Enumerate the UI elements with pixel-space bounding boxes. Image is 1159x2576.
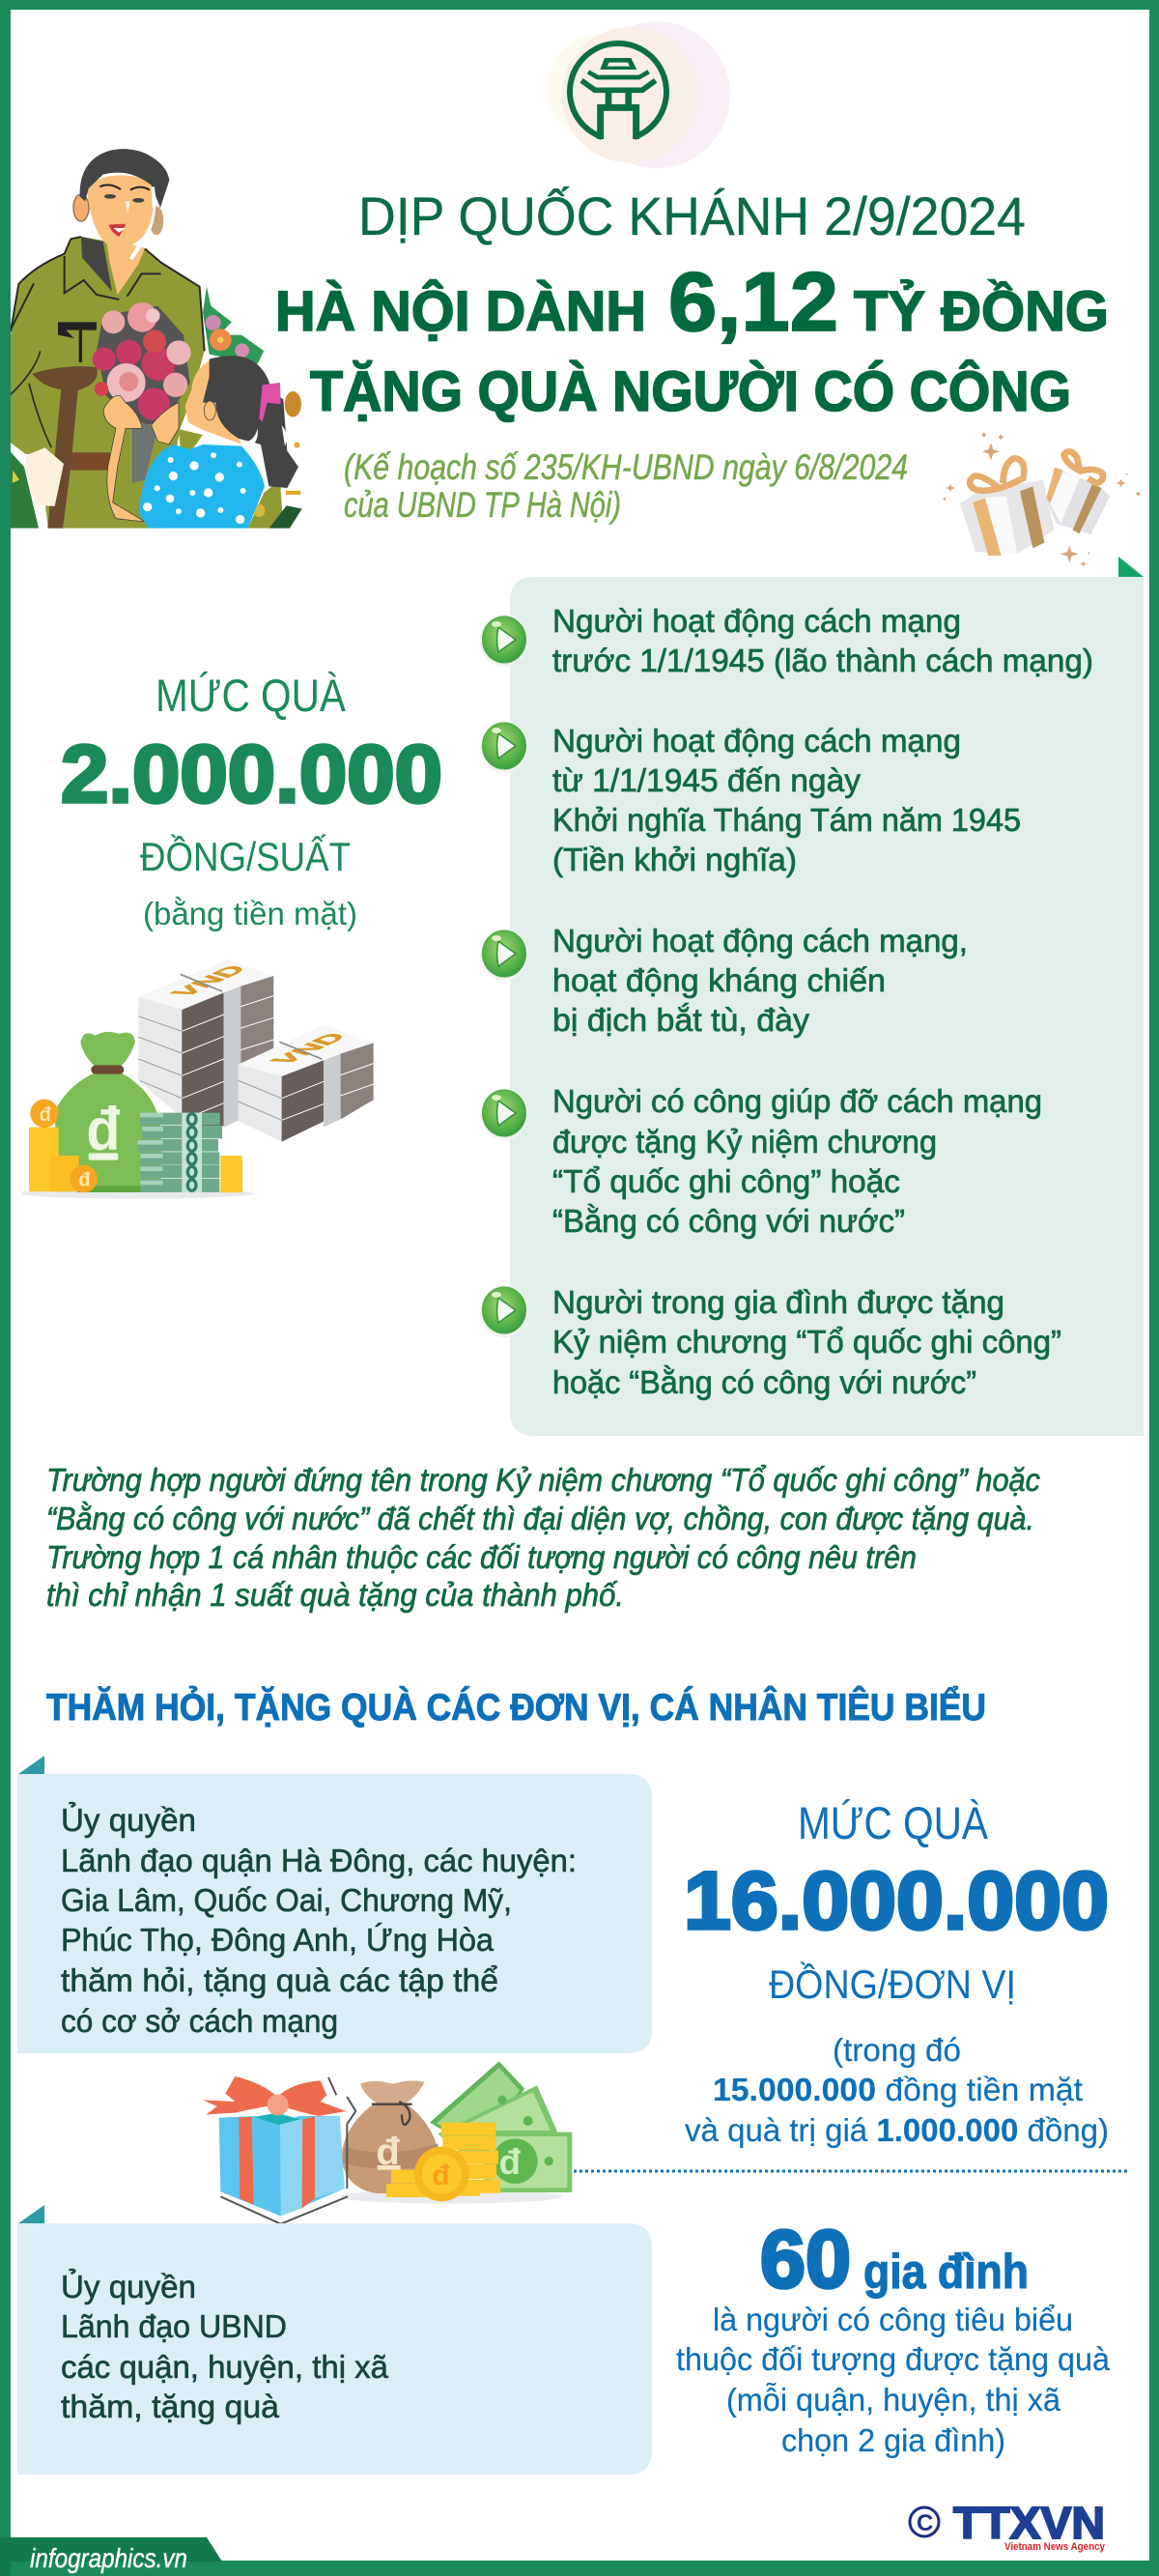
gift amount: 2.000.000: ĐỒNG/SUẤT — [140, 833, 351, 879]
item 3: bị địch bắt tù, đày — [552, 1002, 810, 1038]
section heading: THĂM HỎI, TẶNG QUÀ CÁC ĐƠN VỊ, CÁ NHÂN TIÊU BIỂU — [46, 1685, 986, 1729]
stat: 60 families: 60 — [760, 2214, 851, 2304]
gift amount: 16.000.000: 16.000.000 — [684, 1855, 1109, 1946]
illustration: gift, bag, coins, banknotes: đ — [499, 2142, 522, 2182]
title line 2: TẶNG QUÀ NGƯỜI CÓ CÔNG — [310, 360, 1071, 423]
item 4: “Tổ quốc ghi công” hoặc — [552, 1163, 900, 1199]
panel: collectives: Phúc Thọ, Đông Anh, Ứng Hòa — [61, 1922, 495, 1958]
illustration: gift, bag, coins, banknotes: đ — [376, 2131, 400, 2173]
item 2: (Tiền khởi nghĩa) — [552, 842, 797, 877]
panel: collectives: Gia Lâm, Quốc Oai, Chương Mỹ, — [61, 1882, 512, 1918]
illustration: money stacks and bag: VND — [166, 963, 253, 999]
item 1: Người hoạt động cách mạng — [552, 603, 961, 639]
item 4: được tặng Kỷ niệm chương — [552, 1124, 937, 1159]
illustration: money stacks and bag: đ — [40, 1104, 52, 1126]
gift amount: 16.000.000: 15.000.000 đồng tiền mặt — [713, 2072, 1083, 2107]
gift amount: 16.000.000 — [684, 1797, 1109, 2148]
stat: 60 families: gia đình — [863, 2245, 1029, 2299]
title line 1: HÀ NỘI DÀNH — [275, 280, 646, 343]
subtitle: plan reference: (Kế hoạch số 235/KH-UBND ngày 6/8/2024 — [344, 447, 908, 487]
item 5: hoặc “Bằng có công với nước” — [552, 1364, 976, 1400]
illustration: gift, bag, coins, banknotes: đ — [432, 2160, 450, 2191]
stat: 60 families: thuộc đối tượng được tặng quà — [676, 2341, 1111, 2377]
gift amount: 2.000.000: MỨC QUÀ — [155, 670, 347, 721]
item 2: từ 1/1/1945 đến ngày — [552, 762, 862, 798]
item 5: Người trong gia đình được tặng — [552, 1284, 1004, 1320]
corner tab — [1118, 557, 1144, 577]
panel: families: Lãnh đạo UBND — [61, 2308, 287, 2344]
panel background — [510, 577, 1144, 1436]
illustration: money stacks and bag: đ — [86, 1096, 121, 1163]
gift amount: 2.000.000 — [61, 670, 442, 931]
item 3: Người hoạt động cách mạng, — [552, 923, 968, 959]
title line 1 — [275, 256, 1109, 349]
note text: Trường hợp 1 cá nhân thuộc các đối tượng người có công nêu trên — [46, 1539, 917, 1575]
heading: occasion: DỊP QUỐC KHÁNH 2/9/2024 — [358, 186, 1026, 246]
note text: Trường hợp người đứng tên trong Kỷ niệm chương “Tổ quốc ghi công” hoặc — [46, 1462, 1040, 1498]
illustration: veteran and girl with flowers — [10, 149, 302, 529]
stat: 60 families: là người có công tiêu biểu — [713, 2302, 1073, 2337]
panel: families: thăm, tặng quà — [61, 2389, 280, 2424]
item 3 — [480, 923, 968, 1038]
stat: 60 families — [676, 2214, 1111, 2458]
stat: 60 families: chọn 2 gia đình) — [781, 2422, 1005, 2458]
item 1 — [480, 603, 1093, 678]
panel: families — [17, 2205, 652, 2475]
panel: families: Ủy quyền — [61, 2269, 196, 2304]
note text: “Bằng có công với nước” đã chết thì đại diện vợ, chồng, con được tặng quà. — [46, 1501, 1034, 1536]
title line 1: TỶ ĐỒNG — [854, 280, 1109, 343]
item 2: Người hoạt động cách mạng — [552, 723, 961, 758]
item 4 — [480, 1083, 1042, 1239]
title line 1: 6,12 — [668, 256, 838, 349]
panel: collectives — [17, 1756, 652, 2053]
subtitle: plan reference: của UBND TP Hà Nội) — [344, 485, 621, 525]
gift amount: 16.000.000: (trong đó — [833, 2032, 961, 2068]
logo: TTXVN — [910, 2498, 1106, 2553]
panel: recipients — [480, 557, 1144, 1436]
gift amount: 16.000.000: ĐỒNG/ĐƠN VỊ — [769, 1961, 1016, 2007]
illustration: money stacks and bag — [20, 959, 374, 1199]
icon: white gift boxes — [944, 432, 1141, 567]
icon: Hanoi emblem — [548, 21, 730, 168]
item 2 — [480, 721, 1021, 877]
panel: collectives: thăm hỏi, tặng quà các tập thể — [61, 1962, 498, 1998]
divider: dotted line — [574, 2170, 1127, 2172]
panel: collectives: Ủy quyền — [61, 1802, 196, 1838]
illustration: gift, bag, coins, banknotes — [203, 2061, 572, 2224]
subtitle: plan reference — [344, 447, 908, 525]
illustration: money stacks and bag: đ — [78, 1169, 91, 1190]
illustration: money stacks and bag: VND — [266, 1031, 353, 1067]
item 3: hoạt động kháng chiến — [552, 962, 886, 998]
item 4: “Bằng có công với nước” — [552, 1203, 905, 1239]
item 1: trước 1/1/1945 (lão thành cách mạng) — [552, 643, 1093, 678]
item 4: Người có công giúp đỡ cách mạng — [552, 1083, 1042, 1119]
note text — [46, 1462, 1040, 1613]
footer source: infographics.vn — [30, 2543, 187, 2573]
logo: TTXVN: Vietnam News Agency — [1004, 2541, 1106, 2553]
item 2: Khởi nghĩa Tháng Tám năm 1945 — [552, 802, 1021, 838]
item 5 — [480, 1284, 1061, 1400]
stat: 60 families: (mỗi quận, huyện, thị xã — [726, 2382, 1061, 2418]
gift amount: 2.000.000: (bằng tiền mặt) — [143, 896, 357, 931]
gift amount: 16.000.000: MỨC QUÀ — [798, 1797, 989, 1848]
gift amount: 16.000.000: và quà trị giá 1.000.000 đồng) — [685, 2112, 1109, 2148]
note text: thì chỉ nhận 1 suất quà tặng của thành phố. — [46, 1577, 624, 1613]
logo: TTXVN: TTXVN — [953, 2498, 1105, 2548]
item 5: Kỷ niệm chương “Tổ quốc ghi công” — [552, 1324, 1061, 1360]
panel: collectives: Lãnh đạo quận Hà Đông, các huyện: — [61, 1843, 577, 1878]
footer tab — [0, 2537, 222, 2576]
panel: families: các quận, huyện, thị xã — [61, 2349, 389, 2385]
gift amount: 2.000.000: 2.000.000 — [61, 729, 442, 819]
panel: collectives: có cơ sở cách mạng — [61, 2003, 338, 2039]
logo: TTXVN: C — [917, 2510, 933, 2536]
